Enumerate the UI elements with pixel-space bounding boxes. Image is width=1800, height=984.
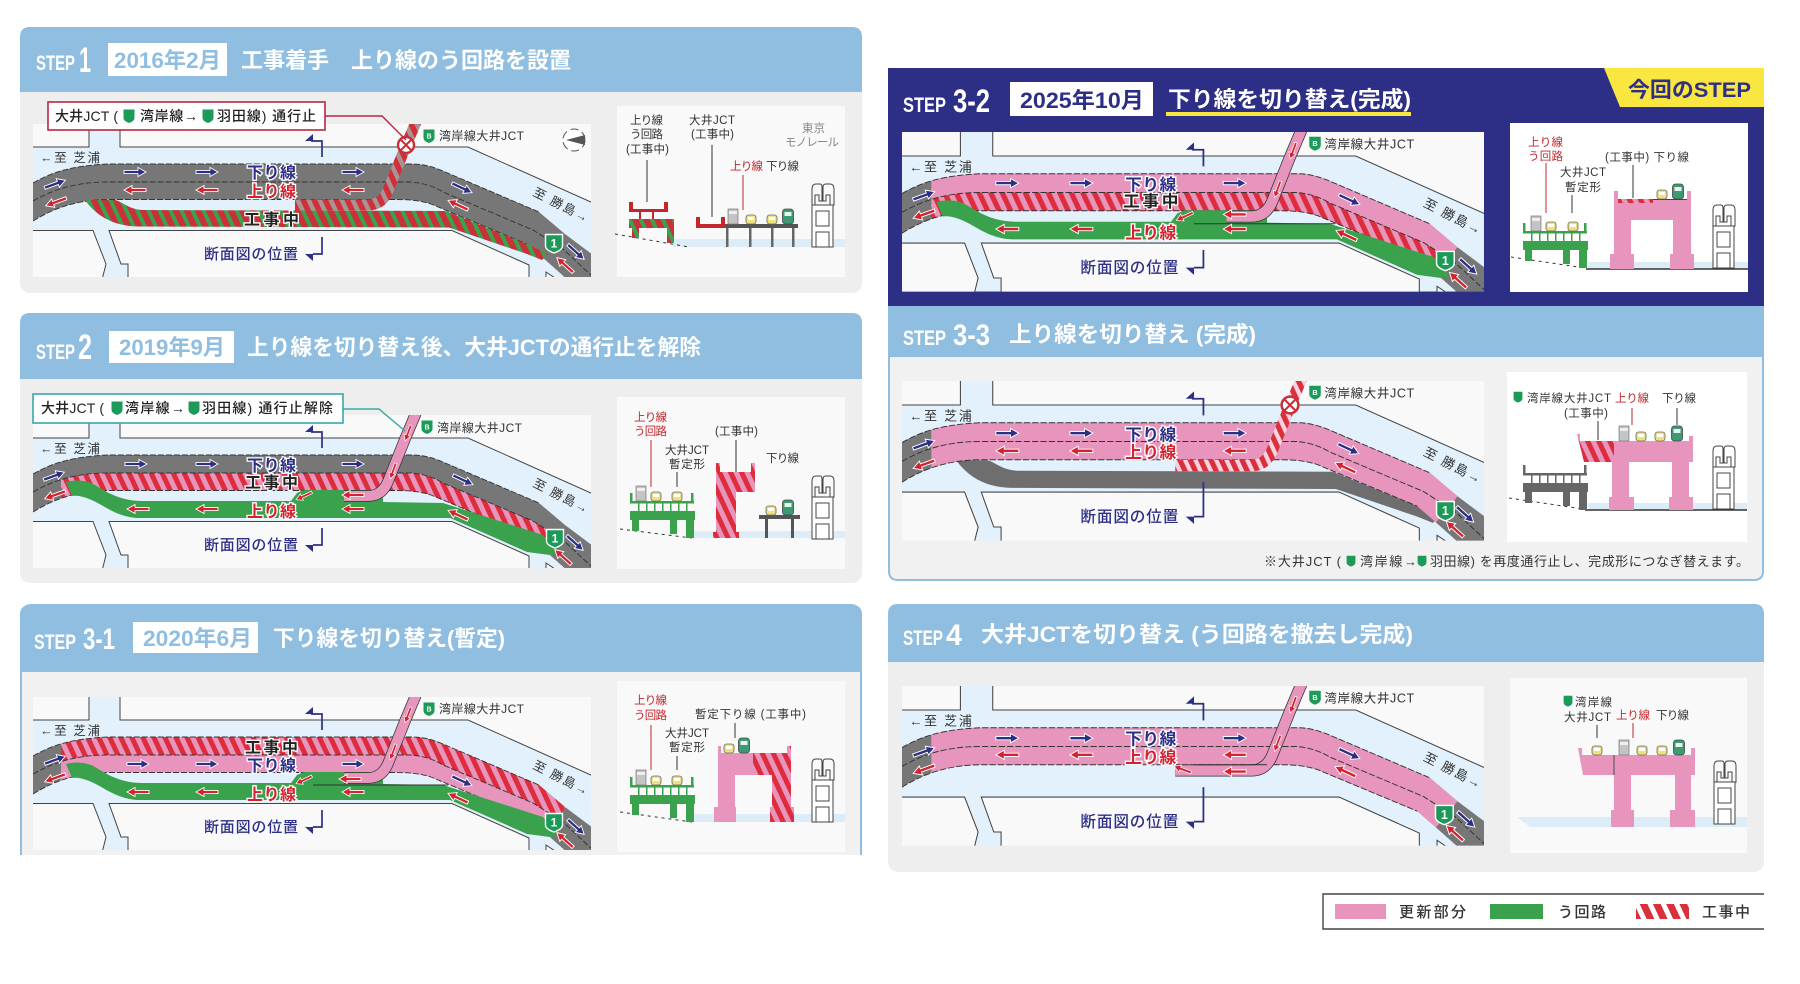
route map: STEP 1: 1 xyxy=(551,236,558,250)
cross-section: STEP 3-3: (工事中) xyxy=(1564,407,1608,420)
cross-section: STEP 3-1 xyxy=(620,694,845,822)
route map: STEP 2: 湾岸線大井JCT xyxy=(437,420,523,435)
callout: closure lifted at Oi JCT: 羽田線) 通行止解除 xyxy=(202,400,333,416)
legend xyxy=(1323,894,1764,929)
header: STEP 3-2: 下り線を切り替え(完成) xyxy=(1168,87,1411,112)
header bar: STEP 3-3: 上り線を切り替え (完成) xyxy=(1009,322,1256,347)
header bar: STEP 2 xyxy=(20,313,862,379)
route map: STEP 3-1: 湾岸線大井JCT xyxy=(439,701,525,716)
route map: STEP 3-2: 上り線 xyxy=(1125,223,1177,242)
header bar: STEP 2: 2019年9月 xyxy=(119,335,225,360)
route map: STEP 3-1: 下り線 xyxy=(247,756,296,775)
callout: closure at Oi JCT: 大井JCT ( xyxy=(55,108,118,124)
route map: STEP 3-2: 湾岸線大井JCT xyxy=(1324,137,1414,152)
cross-section: STEP 3-3: 下り線 xyxy=(1662,392,1696,405)
cross-section: STEP 3-1: 暫定形 xyxy=(669,740,706,754)
header bar: STEP 3-1: 3-1 xyxy=(83,623,115,656)
cross-section: STEP 4: 大井JCT xyxy=(1564,710,1611,724)
header bar: STEP 4 xyxy=(888,604,1764,662)
callout: closure at Oi JCT: 羽田線) 通行止 xyxy=(217,108,316,124)
panel: STEP 3-3 xyxy=(888,307,1764,580)
cross-section: STEP 1: (工事中) xyxy=(626,143,669,156)
cross-section: STEP 4 xyxy=(1510,678,1747,853)
panel: STEP 3-1 xyxy=(20,604,862,855)
header bar: STEP 3-1: 下り線を切り替え(暫定) xyxy=(273,626,505,651)
note: re-closure of Oi JCT xyxy=(1264,554,1749,569)
route map: STEP 1: ←至 芝浦 xyxy=(40,151,100,165)
route map: STEP 4: B xyxy=(1312,693,1318,702)
route map: STEP 3-2: 断面図の位置 xyxy=(1080,259,1178,277)
cross-section: STEP 2: 下り線 xyxy=(766,452,800,465)
note: re-closure of Oi JCT: 羽田線) を再度通行止し、完成形につなぎ替えます。 xyxy=(1430,554,1749,569)
route map: STEP 1: B xyxy=(426,134,432,140)
cross-section: STEP 3-2: う回路 xyxy=(1528,149,1564,163)
route map: STEP 3-3: 下り線 xyxy=(1125,425,1177,444)
cross-section: STEP 1: う回路 xyxy=(630,127,664,141)
legend: 更新部分 xyxy=(1399,904,1466,921)
header: STEP 3-2: 3-2 xyxy=(953,83,990,119)
cross-section: STEP 2: 上り線 xyxy=(634,411,668,424)
cross-section: STEP 2: (工事中) xyxy=(715,425,758,438)
route map: STEP 4: 下り線 xyxy=(1125,729,1177,748)
header bar: STEP 2: 2 xyxy=(78,328,92,367)
panel: STEP 4 xyxy=(888,604,1764,872)
callout: closure at Oi JCT xyxy=(48,102,406,140)
cross-section: STEP 1: 上り線 xyxy=(730,160,764,173)
header: STEP 3-2: STEP xyxy=(903,94,946,117)
callout: closure lifted at Oi JCT xyxy=(33,394,405,431)
callout: closure lifted at Oi JCT: 湾岸線→ xyxy=(125,400,185,416)
header bar: STEP 3-1 xyxy=(20,605,862,672)
route map: STEP 1: 至 勝島→ xyxy=(531,184,591,225)
cross-section: STEP 3-3: 湾岸線大井JCT xyxy=(1527,391,1611,405)
header: STEP 3-2 xyxy=(903,82,1411,119)
route map: STEP 3-2: B xyxy=(1312,139,1318,148)
header bar: STEP 1: 工事着手 上り線のう回路を設置 xyxy=(241,48,571,73)
cross-section: STEP 3-1: 上り線 xyxy=(634,694,668,707)
route map: STEP 3-2: 工事中 xyxy=(1123,192,1178,211)
tag: current step xyxy=(1604,68,1764,107)
route map: STEP 4: 至 勝島→ xyxy=(1421,749,1484,791)
route map: STEP 4: ←至 芝浦 xyxy=(909,714,972,729)
header bar: STEP 4: STEP xyxy=(903,627,943,650)
legend: 工事中 xyxy=(1702,904,1750,921)
route map: STEP 3-2: 下り線 xyxy=(1125,175,1177,194)
route map: STEP 1: 断面図の位置 xyxy=(204,246,298,263)
cross-section: STEP 1: (工事中) xyxy=(691,128,734,141)
header: STEP 3-2: 2025年10月 xyxy=(1020,88,1144,113)
note: re-closure of Oi JCT: ※大井JCT ( xyxy=(1264,554,1342,569)
cross-section: STEP 3-2: 上り線 xyxy=(1528,136,1564,149)
route map: STEP 2: 下り線 xyxy=(247,456,296,475)
route map: STEP 4: 断面図の位置 xyxy=(1080,813,1178,831)
route map: STEP 4: 上り線 xyxy=(1125,748,1177,767)
route map: STEP 2: 工事中 xyxy=(245,473,298,492)
cross-section: STEP 2: う回路 xyxy=(634,424,668,438)
route map: STEP 3-3: 1 xyxy=(1442,504,1449,518)
route map: STEP 4 xyxy=(900,684,1486,850)
panel: STEP 3-2 (current) xyxy=(888,68,1764,307)
route map: STEP 3-1: 上り線 xyxy=(247,785,296,804)
cross-section: STEP 3-2: (工事中) 下り線 xyxy=(1605,151,1690,164)
cross-section: STEP 4: 湾岸線 xyxy=(1575,695,1612,709)
route map: STEP 1: 上り線 xyxy=(247,182,296,201)
cross-section: STEP 4: 下り線 xyxy=(1656,709,1690,722)
route map: STEP 3-3: 上り線 xyxy=(1125,443,1177,462)
route map: STEP 3-1: B xyxy=(426,706,432,714)
header bar: STEP 1: 2016年2月 xyxy=(114,48,221,73)
cross-section: STEP 3-2: 暫定形 xyxy=(1565,180,1602,194)
note: re-closure of Oi JCT: 湾岸線→ xyxy=(1360,554,1417,569)
header bar: STEP 3-3: STEP xyxy=(903,327,946,350)
route map: STEP 3-3 xyxy=(900,379,1486,545)
header bar: STEP 2: 上り線を切り替え後、大井JCTの通行止を解除 xyxy=(247,335,701,360)
route map: STEP 4: 湾岸線大井JCT xyxy=(1324,691,1414,706)
legend: う回路 xyxy=(1558,904,1606,921)
route map: STEP 2 xyxy=(31,413,593,572)
route map: STEP 2: 断面図の位置 xyxy=(204,537,298,554)
route map: STEP 3-1: 1 xyxy=(551,816,558,830)
header bar: STEP 2: STEP xyxy=(36,341,75,364)
header bar: STEP 3-3: 3-3 xyxy=(953,319,990,352)
cross-section: STEP 3-3 xyxy=(1507,372,1747,542)
route map: STEP 3-1: 断面図の位置 xyxy=(204,819,298,836)
route map: STEP 1: 工事中 xyxy=(244,210,299,229)
cross-section: STEP 1: 下り線 xyxy=(766,160,800,173)
route map: STEP 3-2: 至 勝島→ xyxy=(1421,195,1484,237)
panel: STEP 1 xyxy=(20,27,862,293)
cross-section: STEP 2 xyxy=(617,397,845,569)
header bar: STEP 1: STEP xyxy=(36,52,75,75)
header bar: STEP 3-1: STEP xyxy=(34,631,76,654)
route map: STEP 2: 至 勝島→ xyxy=(531,475,591,516)
route map: STEP 1: 下り線 xyxy=(247,163,296,182)
cross-section: STEP 1: 大井JCT xyxy=(689,113,735,127)
route map: STEP 3-3: 至 勝島→ xyxy=(1421,444,1484,486)
header bar: STEP 1: 1 xyxy=(79,41,91,80)
route map: STEP 2: B xyxy=(424,424,430,432)
route map: STEP 4: 1 xyxy=(1441,808,1448,822)
cross-section: STEP 3-1: 大井JCT xyxy=(665,726,709,740)
route map: STEP 2: 1 xyxy=(552,532,559,546)
route map: STEP 3-2: 1 xyxy=(1442,254,1449,268)
header bar: STEP 4: 4 xyxy=(946,619,962,652)
cross-section: STEP 3-2 xyxy=(1510,123,1748,292)
cross-section: STEP 1: モノレール xyxy=(785,137,839,149)
cross-section: STEP 2: 暫定形 xyxy=(669,457,706,471)
route map: STEP 3-3: B xyxy=(1312,388,1318,397)
route map: STEP 2: ←至 芝浦 xyxy=(40,442,100,456)
route map: STEP 3-3: ←至 芝浦 xyxy=(909,409,972,424)
route map: STEP 3-1: ←至 芝浦 xyxy=(40,724,100,738)
header bar: STEP 1 xyxy=(20,27,862,92)
callout: closure lifted at Oi JCT: 大井JCT ( xyxy=(41,400,104,416)
route map: STEP 3-1: 至 勝島→ xyxy=(531,757,591,798)
cross-section: STEP 3-2: 大井JCT xyxy=(1560,165,1606,179)
panel: STEP 2 xyxy=(20,313,862,583)
cross-section: STEP 4: 上り線 xyxy=(1616,709,1650,722)
route map: STEP 3-1: 工事中 xyxy=(245,738,298,757)
cross-section: STEP 1: 東京 xyxy=(802,122,825,135)
route map: STEP 3-3: 断面図の位置 xyxy=(1080,508,1178,526)
cross-section: STEP 3-3: 上り線 xyxy=(1615,392,1650,405)
cross-section: STEP 1 xyxy=(615,106,845,277)
cross-section: STEP 1: 上り線 xyxy=(630,114,664,127)
cross-section: STEP 3-1: う回路 xyxy=(634,708,668,722)
cross-section: STEP 3-1: 暫定下り線 (工事中) xyxy=(695,707,806,721)
cross-section: STEP 2: 大井JCT xyxy=(665,443,709,457)
route map: STEP 3-2: ←至 芝浦 xyxy=(909,160,972,175)
route map: STEP 1: 湾岸線大井JCT xyxy=(439,128,525,143)
header bar: STEP 3-1: 2020年6月 xyxy=(143,626,252,651)
tag: current step: 今回のSTEP xyxy=(1628,79,1751,102)
route map: STEP 1 xyxy=(31,122,593,281)
route map: STEP 3-3: 湾岸線大井JCT xyxy=(1324,386,1414,401)
route map: STEP 3-1 xyxy=(31,695,593,854)
route map: STEP 2: 上り線 xyxy=(247,502,296,521)
header bar: STEP 4: 大井JCTを切り替え (う回路を撤去し完成) xyxy=(981,622,1413,647)
callout: closure at Oi JCT: 湾岸線→ xyxy=(140,108,198,124)
header bar: STEP 3-3 xyxy=(888,307,1764,357)
route map: STEP 3-2 xyxy=(900,130,1486,296)
